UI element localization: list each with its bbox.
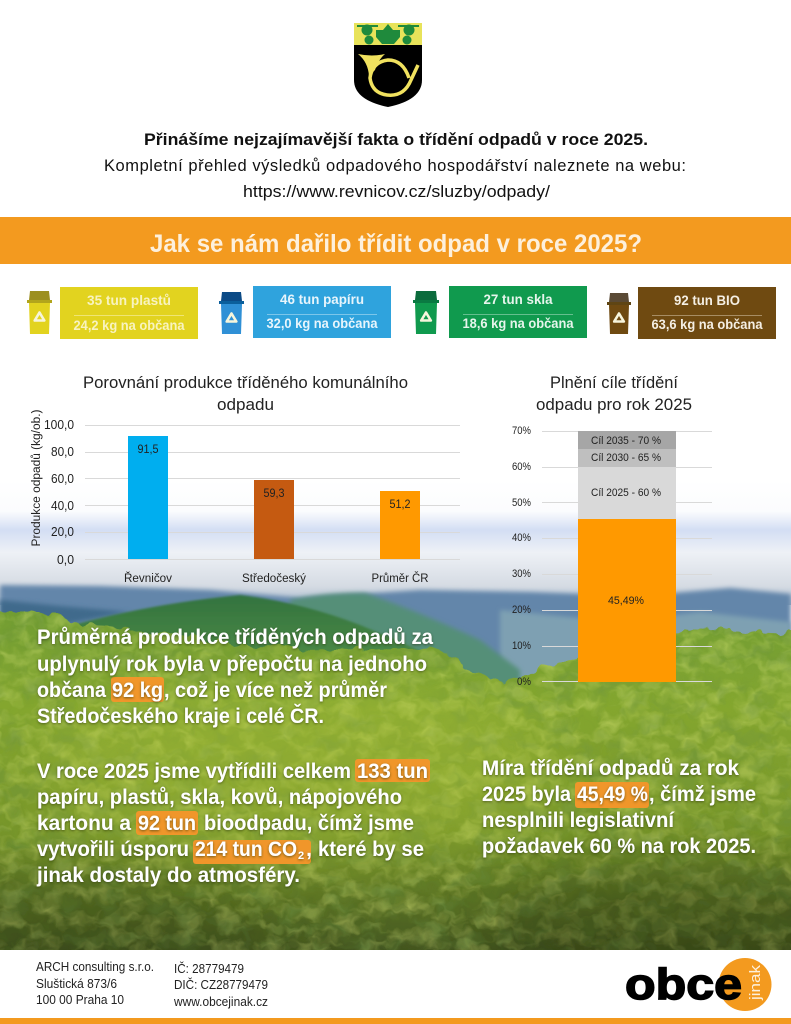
stacked bar chart: target fulfilment: 30% xyxy=(512,568,531,580)
stat card: bio xyxy=(607,287,776,339)
text block: sorting rate: Míra třídění odpadů za rok xyxy=(482,756,739,780)
text block: sorted totals xyxy=(36,759,430,887)
company ids: www.obcejinak.cz xyxy=(173,995,268,1009)
stacked bar chart: target fulfilment: 50% xyxy=(512,497,531,509)
text block: sorting rate: požadavek 60 % na rok 2025. xyxy=(482,834,756,858)
stacked bar chart: target fulfilment: 40% xyxy=(512,532,531,544)
intro text: https://www.revnicov.cz/sluzby/odpady/ xyxy=(243,182,550,201)
company address: 100 00 Praha 10 xyxy=(36,993,124,1007)
stat card: plastics xyxy=(27,287,198,339)
stacked bar chart: target fulfilment: 10% xyxy=(512,640,531,652)
stat card: glass: 27 tun skla xyxy=(484,292,553,307)
stat card: glass: 18,6 kg na občana xyxy=(462,315,574,331)
text block: sorted totals: vytvořili úsporu xyxy=(37,837,189,861)
text block: sorted totals: 214 tun CO xyxy=(195,837,297,861)
bar chart: waste production comparison: 91,5 xyxy=(138,444,158,456)
text block: sorted totals: 133 tun xyxy=(357,759,428,783)
post horn xyxy=(370,60,418,95)
stat card: paper: 46 tun papíru xyxy=(280,292,364,307)
stat card: plastics: 35 tun plastů xyxy=(87,293,171,308)
text block: sorting rate: 2025 byla xyxy=(482,782,572,806)
bar chart: waste production comparison: Průměr ČR xyxy=(372,572,428,585)
icon: brown bin xyxy=(607,293,631,334)
bar chart: waste production comparison xyxy=(31,374,460,585)
text block: sorted totals: bioodpadu, čímž jsme xyxy=(204,811,414,835)
chart title: odpadu pro rok 2025 xyxy=(536,396,692,414)
stat card: bio: 92 tun BIO xyxy=(674,293,740,308)
company ids xyxy=(173,961,268,1009)
stacked bar chart: target fulfilment xyxy=(512,374,712,688)
company address: Sluštická 873/6 xyxy=(36,977,117,991)
text block: sorted totals: jinak dostaly do atmosféry. xyxy=(36,863,300,887)
text block: average production: Středočeského kraje i celé ČR. xyxy=(37,703,324,728)
highlight: 45,49 % xyxy=(575,782,649,808)
stat card: glass xyxy=(413,286,587,338)
highlight: 92 kg xyxy=(111,677,164,702)
text block: sorting rate: 45,49 % xyxy=(577,782,648,806)
orange title band: Jak se nám dařilo třídit odpad v roce 2025? xyxy=(150,230,642,258)
bar chart: waste production comparison: 51,2 xyxy=(390,499,410,511)
text block: sorted totals: , xyxy=(306,837,312,861)
bar chart: waste production comparison: 60,0 xyxy=(51,472,74,486)
background landscape photo xyxy=(0,513,791,950)
icon: blue bin xyxy=(219,292,244,334)
stacked bar chart: target fulfilment: Cíl 2035 - 70 % xyxy=(591,435,661,447)
text block: average production: uplynulý rok byla v přepočtu na jednoho xyxy=(37,652,427,676)
chart title: Plnění cíle třídění xyxy=(550,374,678,392)
company address: ARCH consulting s.r.o. xyxy=(36,960,154,974)
text block: sorted totals: V roce 2025 jsme vytřídili celkem xyxy=(37,759,351,783)
logo: obce jinak: obce xyxy=(625,960,742,1009)
highlight: 133 tun xyxy=(355,759,430,782)
logo: obce jinak xyxy=(625,958,772,1011)
stacked bar chart: target fulfilment: 45,49% xyxy=(608,595,644,607)
text block: average production: občana xyxy=(37,678,107,702)
stat card: bio: 63,6 kg na občana xyxy=(652,316,763,332)
stacked bar chart: target fulfilment: Cíl 2025 - 60 % xyxy=(591,487,661,499)
bar chart: waste production comparison: Středočeský xyxy=(242,573,306,585)
stat card: plastics: 24,2 kg na občana xyxy=(74,317,185,333)
bar chart: waste production comparison: Řevničov xyxy=(124,572,172,585)
footer xyxy=(0,950,791,1024)
intro text: Přinášíme nejzajímavější fakta o třídění odpadů v roce 2025. xyxy=(144,131,648,149)
intro text xyxy=(104,131,686,201)
leaves xyxy=(357,24,419,44)
chart title xyxy=(536,374,692,414)
text block: average production xyxy=(37,625,434,728)
chart title: Porovnání produkce tříděného komunálního xyxy=(83,374,408,392)
text block: sorted totals: 92 tun xyxy=(138,811,196,835)
company address xyxy=(36,960,154,1007)
stacked bar chart: target fulfilment: Cíl 2030 - 65 % xyxy=(591,452,661,464)
text block: sorted totals: 2 xyxy=(298,850,304,862)
text block: average production: Průměrná produkce tříděných odpadů za xyxy=(37,625,434,649)
company ids: DIČ: CZ28779479 xyxy=(174,977,268,992)
icon: green bin xyxy=(413,291,439,334)
logo: obce jinak: jinak xyxy=(747,964,764,1001)
icon: yellow bin xyxy=(27,291,52,334)
text block: average production: 92 kg xyxy=(112,678,163,702)
highlight: 92 tun xyxy=(136,811,198,835)
bar chart: waste production comparison: 20,0 xyxy=(51,525,74,539)
bar chart: waste production comparison: 80,0 xyxy=(51,445,74,459)
highlight: 214 tun CO2 xyxy=(193,840,311,864)
bar chart: waste production comparison: 100,0 xyxy=(44,418,74,432)
stacked bar chart: target fulfilment: 70% xyxy=(512,425,531,437)
bar chart: waste production comparison: 59,3 xyxy=(264,488,284,500)
stacked bar chart: target fulfilment: 20% xyxy=(512,604,531,616)
chart title xyxy=(83,374,408,414)
text block: sorting rate: nesplnili legislativní xyxy=(482,808,675,832)
text block: sorting rate: , čímž jsme xyxy=(649,782,756,806)
bar chart: waste production comparison: 0,0 xyxy=(57,553,74,567)
intro text: Kompletní přehled výsledků odpadového hospodářství naleznete na webu: xyxy=(104,157,686,175)
bar segments xyxy=(578,431,676,682)
stacked bar chart: target fulfilment: 60% xyxy=(512,461,531,473)
text block: sorting rate xyxy=(482,756,756,858)
municipal coat of arms xyxy=(354,23,422,107)
text block: sorted totals: papíru, plastů, skla, kovů, nápojového xyxy=(37,785,402,809)
axis label: Produkce odpadů (kg/ob.) xyxy=(31,409,43,546)
text block: average production: , což je více než průměr xyxy=(164,678,388,702)
stat card: paper xyxy=(219,286,391,338)
chart title: odpadu xyxy=(217,396,274,414)
orange title band xyxy=(0,217,791,264)
text block: sorted totals: kartonu a xyxy=(37,811,132,835)
stacked bar chart: target fulfilment: 0% xyxy=(517,676,531,688)
bars xyxy=(128,436,420,559)
text block: sorted totals: které by se xyxy=(318,837,424,861)
bar chart: waste production comparison: 40,0 xyxy=(51,499,74,513)
company ids: IČ: 28779479 xyxy=(174,961,244,976)
stat card: paper: 32,0 kg na občana xyxy=(266,315,378,331)
